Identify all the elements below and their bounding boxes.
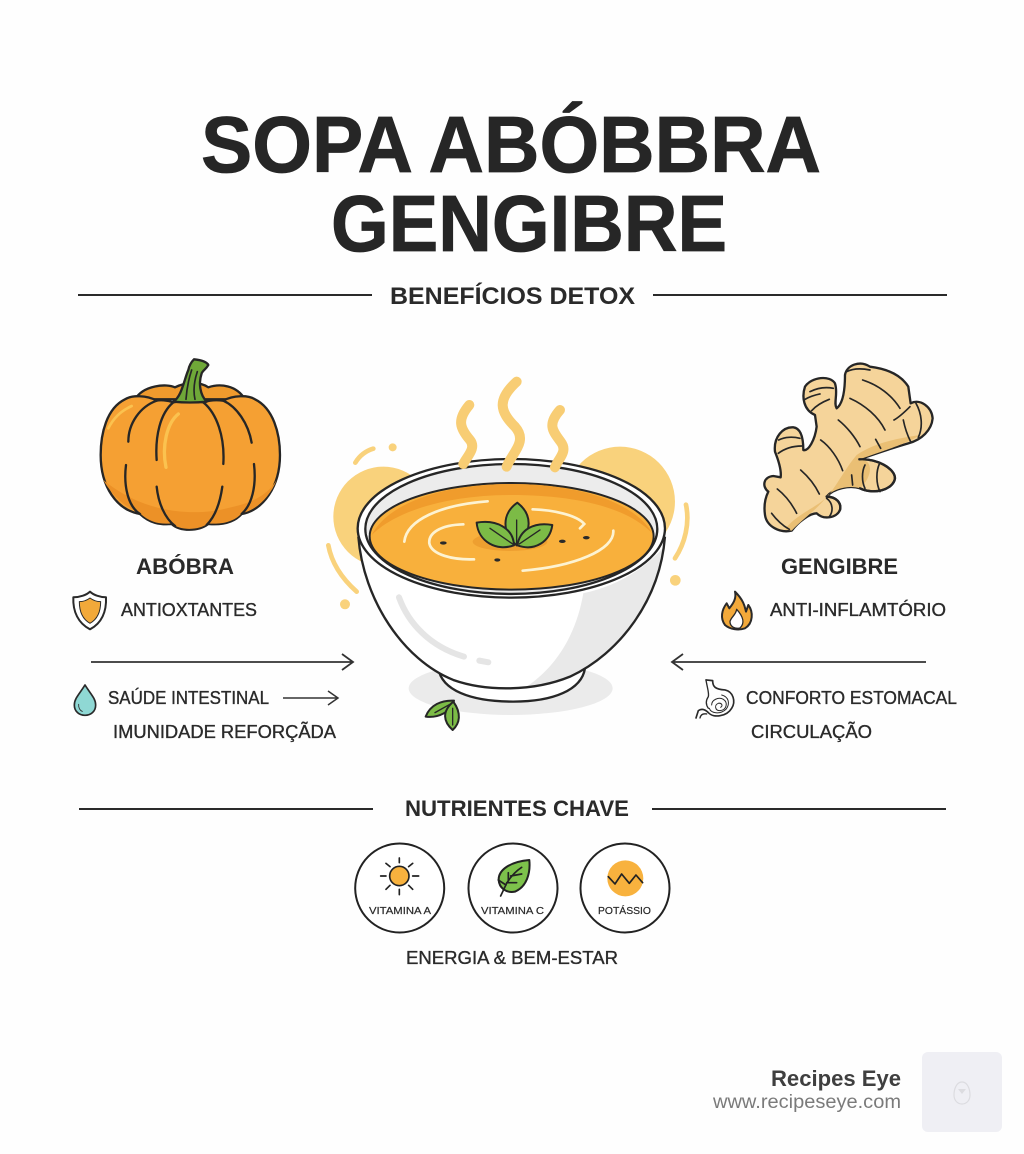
bowl rim [358,459,665,598]
steam [461,382,563,467]
brand name: Recipes Eye [771,1066,901,1091]
title: GENGIBRE [331,179,727,268]
icon: stomach [696,680,734,718]
logo placeholder [922,1052,1002,1132]
nutrient badge: vitamina c [468,844,558,932]
section heading: benefícios detox: BENEFÍCIOS DETOX [390,282,635,310]
arrow: saúde intestinal [283,691,338,705]
label: circulação: CIRCULAÇÃO [751,721,872,742]
nutrient badge: potássio: POTÁSSIO [598,904,651,917]
bowl foot [438,668,585,702]
brand url: www.recipeseye.com [712,1092,901,1113]
arrow: ginger to soup [672,654,926,670]
arrow: pumpkin to soup [91,654,353,670]
icon: water drop [74,685,96,715]
heading: gengibre: GENGIBRE [781,554,898,579]
nutrient badge: vitamina c: VITAMINA C [481,905,544,917]
icon: pumpkin [101,359,280,530]
icon: ginger root [764,364,933,531]
title [201,100,821,268]
label: antioxtantes: ANTIOXTANTES [121,600,257,620]
icon: leaf [498,860,530,896]
caption: energia e bem-estar: ENERGIA & BEM-ESTAR [406,947,618,968]
title: SOPA ABÓBBRA [201,100,821,189]
heading: abóbra: ABÓBRA [136,554,234,579]
nutrient badge: vitamina a [355,844,444,932]
cream swirls [404,501,613,571]
icon: flame [722,592,752,629]
table shadow [409,662,613,715]
icon: sun [381,858,419,895]
bowl body [358,537,665,688]
decorative blobs [333,443,681,609]
nutrient badge: potássio [580,844,670,932]
herb garnish [477,503,552,547]
illustration: soup bowl [328,382,687,730]
seeds [440,536,590,562]
label: anti-inflamatório: ANTI-INFLAMTÓRIO [770,599,946,620]
label: conforto estomacal: CONFORTO ESTOMACAL [746,688,957,708]
fallen leaf [426,701,459,730]
label: saúde intestinal: SAÚDE INTESTINAL [108,687,269,708]
icon: potassium wave [607,860,643,896]
section heading: nutrientes chave: NUTRIENTES CHAVE [405,796,629,821]
label: imunidade reforçada: IMUNIDADE REFORÇÃDA [113,721,336,742]
soup [370,483,654,590]
nutrient badge: vitamina a: VITAMINA A [369,905,431,917]
icon: shield [73,592,106,629]
